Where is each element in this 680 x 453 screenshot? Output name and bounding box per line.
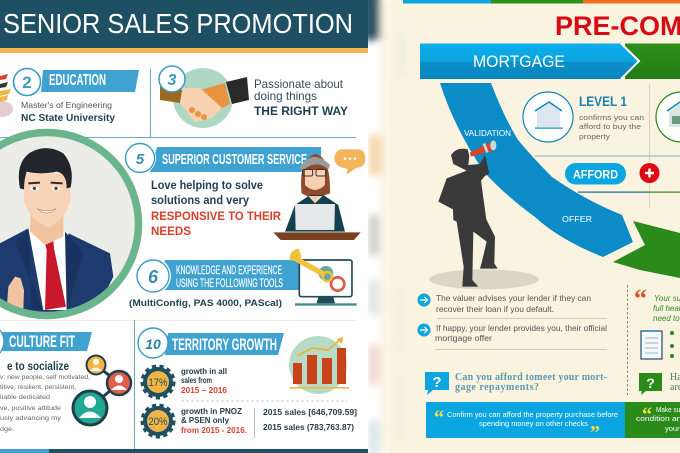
text: socialize: v: new people, self motivated, [0, 374, 90, 381]
text: note 1 [436, 293, 591, 314]
text: passionate [254, 77, 348, 118]
top colour stripe [403, 0, 680, 4]
portrait: man in circle [0, 132, 139, 317]
text: sales figures: 2015 sales (783,763.87) [263, 423, 354, 432]
callout: blue quote: spending money on other checks [479, 419, 588, 428]
title banner [0, 0, 368, 53]
icon: handshake [160, 68, 249, 128]
suit [0, 228, 113, 317]
text: degree [21, 100, 115, 124]
icon: books [0, 74, 13, 117]
text: love helping [151, 180, 282, 238]
icon: gear 20% [143, 406, 173, 436]
text: passionate: Passionate about [254, 77, 344, 91]
text: love helping: NEEDS [151, 226, 191, 238]
list: mortgage notes [418, 293, 607, 350]
callout: blue quote [426, 402, 626, 444]
badge: 5 [124, 142, 156, 174]
text: love helping: RESPONSIVE TO THEIR [151, 211, 282, 223]
hand [7, 277, 24, 310]
text: note 1: The valuer advises your lender if they can [436, 293, 591, 303]
text: degree: NC State University [21, 113, 115, 124]
text: growth PNOZ: from 2015 - 2016. [181, 426, 247, 435]
badge: 6: 6 [148, 267, 159, 287]
text: growth PNOZ: & PSEN only [181, 416, 230, 425]
text: passionate: doing things [254, 89, 317, 103]
text: level 1 description: property [579, 132, 610, 141]
text: degree: Master's of Engineering [21, 100, 112, 110]
text: growth all sales [181, 367, 228, 395]
text: socialize: titive, resilient, persistent, [0, 384, 76, 391]
text: love helping: Love helping to solve [151, 180, 263, 192]
icon: people network [73, 356, 131, 425]
text: note 2: If happy, your lender provides you, their official [436, 323, 607, 333]
pill: afford: AFFORD [573, 168, 618, 182]
callout: blue quote: “ [434, 407, 444, 429]
text: sales figures: 2015 sales [646,709.59] [263, 408, 357, 417]
callout: question afford [425, 372, 607, 395]
text: growth all sales: growth in all [181, 367, 227, 376]
banner: customer service [150, 147, 321, 172]
banner: culture fit: CULTURE FIT [9, 332, 75, 351]
section: territory growth [138, 328, 357, 438]
panel: pre-completion right infographic [403, 0, 680, 444]
badge: 3: 3 [168, 72, 177, 89]
callout: green quote: condition and [636, 414, 680, 423]
icon: gear 17%: 17% [148, 377, 168, 389]
text: love helping: solutions and very [151, 195, 250, 207]
text: tools: (MultiConfig, PAS 4000, PAScal) [129, 298, 282, 309]
icon: bullet arrow 1 [418, 294, 430, 306]
banner: knowledge: USING THE FOLLOWING TOOLS [176, 276, 283, 290]
icon: gear 20%: 20% [148, 416, 168, 428]
text: socialize: e to socialize [7, 361, 69, 373]
badge: 3 [159, 66, 185, 92]
badge: 9 partial [0, 330, 4, 353]
text: socialize: usly advancing my [0, 415, 62, 422]
section: knowledge and experience [129, 248, 357, 309]
banner: territory growth [165, 333, 284, 355]
eyes [30, 186, 39, 190]
section: passion [159, 66, 348, 128]
arrow: green curve [613, 221, 680, 278]
callout: question green: ? [646, 375, 655, 391]
text: sales figures [263, 408, 357, 432]
head [23, 173, 71, 228]
callout: green quote: “ [642, 404, 652, 426]
banner: knowledge [160, 260, 300, 290]
section: superior customer service [124, 142, 365, 240]
section: culture fit [0, 330, 131, 433]
level 1: LEVEL 1 [579, 94, 627, 109]
icon: gear 17% [143, 367, 173, 397]
icon: house level 2 [656, 92, 680, 142]
text: green quote surveyor: need to [653, 314, 680, 323]
callout: question green [639, 372, 680, 395]
callout: green quote: your [665, 424, 680, 433]
banner: education: EDUCATION [49, 72, 106, 89]
curved arrow: validation to offer: OFFER [562, 215, 592, 224]
hair [19, 148, 72, 189]
text: growth PNOZ: growth in PNOZ [181, 407, 242, 416]
callout: green quote [625, 402, 680, 438]
callout: blue quote: ” [590, 422, 600, 444]
badge: 10 [138, 328, 168, 358]
text: growth PNOZ [181, 407, 247, 435]
banner: customer service: SUPERIOR CUSTOMER SERVICE [162, 152, 307, 168]
chart: growth bars [289, 336, 349, 394]
smile [37, 209, 56, 213]
text: level 1 description [579, 113, 644, 141]
text: note 2 [435, 323, 607, 343]
badge: 10: 10 [145, 336, 161, 352]
banner: territory growth: TERRITORY GROWTH [172, 335, 277, 354]
icon: support agent [273, 154, 361, 240]
badge: 2: 2 [22, 73, 32, 92]
text: green quote surveyor [634, 284, 680, 323]
text: growth all sales: sales from [181, 376, 212, 385]
badge: 5: 5 [136, 151, 145, 168]
text: level 1 description: afford to buy the [579, 122, 641, 131]
pill: afford [565, 163, 626, 184]
icon: person with megaphone [429, 140, 539, 289]
text: socialize: dge. [0, 426, 14, 433]
arrow: mortgage: MORTGAGE [473, 53, 565, 71]
level 1 [523, 92, 644, 142]
curved arrow: validation to offer: VALIDATION [464, 129, 511, 138]
title banner: SENIOR SALES PROMOTION [3, 8, 353, 39]
icon: monitor with tools [290, 248, 357, 306]
callout: question afford: Can you afford tomeet your mort- [455, 372, 607, 383]
icon: question blue [425, 372, 449, 395]
text: socialize: ve, positive attitude [0, 405, 61, 412]
text: level 1 description: confirms you can [579, 113, 644, 122]
section: education [12, 67, 139, 124]
icon: house level 1 [523, 92, 573, 142]
rule lines [535, 156, 680, 157]
callout: blue quote: Confirm you can afford the property purchase before [447, 410, 618, 419]
text: socialize [0, 361, 90, 433]
text: growth all sales: 2015 – 2016 [181, 386, 228, 395]
callout: question afford: gage repayments? [455, 382, 539, 393]
text: note 2: mortgage offer [435, 333, 492, 343]
text: passionate: THE RIGHT WAY [254, 104, 348, 118]
curved arrow: validation to offer [440, 83, 633, 257]
icon: bullet arrow 2 [418, 324, 430, 336]
neck [30, 213, 63, 245]
text: green quote surveyor: “ [634, 284, 647, 313]
panel: cream right background [385, 0, 680, 453]
footer bar [0, 449, 368, 453]
text: socialize: liable dedicated [0, 394, 50, 401]
icon: question blue: ? [432, 374, 442, 391]
icon: speech bubble [334, 149, 365, 175]
badge: 6 [135, 258, 171, 294]
panel: left resume infographic [0, 0, 368, 453]
panel: blurred gutter between panels [362, 0, 403, 453]
banner: knowledge: KNOWLEDGE AND EXPERIENCE [176, 263, 282, 277]
arrow: mortgage [420, 44, 680, 79]
text: note 1: recover their loan if you default. [436, 304, 554, 314]
icon: clipboard [641, 330, 662, 359]
icon: plus [640, 163, 660, 183]
bullets [670, 331, 674, 358]
